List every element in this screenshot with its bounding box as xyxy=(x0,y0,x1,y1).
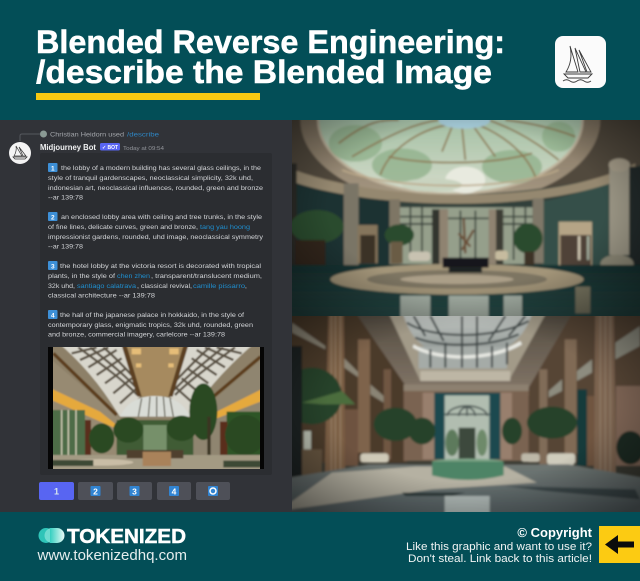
columns xyxy=(344,183,359,265)
bot badge: ✓ BOT xyxy=(102,145,118,151)
image: lobby with stained glass dome xyxy=(292,120,640,316)
button 3 xyxy=(117,482,152,500)
floor xyxy=(53,454,260,469)
palms xyxy=(89,383,265,455)
button 3: 3 xyxy=(132,486,137,496)
prompt 3: , xyxy=(245,283,247,290)
button 1: 1 xyxy=(54,486,59,496)
icon: bot avatar xyxy=(9,142,31,164)
button 4 xyxy=(157,482,191,500)
prompt 3: 32k uhd, xyxy=(48,283,75,290)
ceiling xyxy=(292,120,640,188)
title: /describe the Blended Image xyxy=(36,54,492,90)
prompt 1: the lobby of a modern building has several glass ceilings, in the xyxy=(61,165,261,172)
prompt 2: of fine lines, delicate curves, green and bronze, xyxy=(48,224,198,231)
image: lobby with skylight and fountain xyxy=(292,316,640,512)
right columns xyxy=(594,303,616,473)
back wall xyxy=(404,384,529,391)
back dome xyxy=(120,396,190,417)
brand name: TOKENIZED xyxy=(67,525,186,548)
band above windows xyxy=(279,163,635,204)
reflections xyxy=(398,294,524,316)
central table xyxy=(127,450,183,458)
floor xyxy=(292,264,640,316)
benches xyxy=(360,453,389,463)
central beam xyxy=(126,347,184,397)
header xyxy=(36,24,606,100)
prompt 3: , transparent/translucent medium, xyxy=(151,273,262,280)
glass foliage xyxy=(329,122,575,183)
left columns xyxy=(325,303,345,473)
right door xyxy=(559,222,592,265)
back curtains and door xyxy=(434,393,500,459)
floor xyxy=(279,464,640,525)
prompt 3: classical architecture --ar 139:78 xyxy=(48,292,155,300)
side walls xyxy=(292,316,406,463)
title underline xyxy=(36,93,260,100)
plants xyxy=(282,368,640,464)
prompt 4: the hall of the japanese palace in hokkaido, in the style of xyxy=(60,312,244,319)
title: Blended Reverse Engineering: xyxy=(36,24,505,60)
skylight frame xyxy=(388,316,546,380)
button 1 xyxy=(39,482,74,500)
copyright text: Don't steal. Link back to this article! xyxy=(408,553,592,565)
prompt 1: 1 xyxy=(51,166,55,172)
prompt 2: impressionist gardens, rounded, uhd image, neoclassical symmetry xyxy=(48,234,264,241)
plants xyxy=(290,210,543,253)
prompt 3: 3 xyxy=(51,264,55,270)
image: blended lobby with glass roof xyxy=(48,347,264,469)
timestamp: Today at 09:54 xyxy=(123,146,164,152)
prompt 4 xyxy=(48,310,253,338)
copyright text: © Copyright xyxy=(517,525,593,540)
central table xyxy=(443,258,489,268)
prompt 3: camille pissarro xyxy=(193,283,245,290)
back wall xyxy=(400,166,640,266)
copyright text xyxy=(406,525,593,565)
button refresh xyxy=(196,482,230,500)
prompt 2 xyxy=(48,212,264,250)
back window with garden xyxy=(117,420,193,455)
prompt 1: indonesian art, neoclassical influences, rounded, green and bronze xyxy=(48,185,263,192)
reply line with user: /describe xyxy=(127,132,160,138)
reply line with user: Christian Heidorn used xyxy=(50,132,124,138)
button 4: 4 xyxy=(172,486,177,496)
central windows xyxy=(399,207,533,264)
icon: Midjourney sailboat xyxy=(555,36,606,88)
prompt 2: --ar 139:78 xyxy=(48,244,83,250)
left door xyxy=(358,225,378,263)
sofas xyxy=(409,252,430,261)
prompt 3: , classical revival, xyxy=(137,283,192,290)
prompt 4: 4 xyxy=(51,312,55,320)
embed card xyxy=(48,163,264,469)
yellow arrow box xyxy=(599,526,640,563)
left vault xyxy=(62,347,140,417)
copyright text: Like this graphic and want to use it? xyxy=(406,541,592,553)
left glass wall xyxy=(53,409,86,456)
button 2 xyxy=(78,482,113,500)
dome ribs xyxy=(339,120,575,186)
prompt 2: tang yau hoong xyxy=(200,224,250,231)
button 2: 2 xyxy=(93,486,98,496)
prompt 1: style of tranquil gardenscapes, neoclassical simplicity, 32k uhd, xyxy=(48,175,253,182)
prompt 3: santiago calatrava xyxy=(77,283,136,290)
skylight glass xyxy=(402,316,532,347)
bot name: Midjourney Bot xyxy=(40,143,96,152)
prompt 1: --ar 139:78 xyxy=(48,194,83,202)
website url: www.tokenizedhq.com xyxy=(36,548,187,564)
prompt 2: an enclosed lobby area with ceiling and tree trunks, in the style xyxy=(61,214,262,221)
prompt 2: 2 xyxy=(51,214,55,222)
right glass wall xyxy=(226,410,260,456)
buttons xyxy=(39,482,230,500)
title xyxy=(36,24,505,90)
footer xyxy=(36,525,640,565)
left and right walls xyxy=(53,362,119,454)
brand logo mark xyxy=(38,528,64,543)
fountain xyxy=(432,459,504,465)
prompt 4: and bronze, commercial imagery, carlelcore --ar 139:78 xyxy=(48,332,225,338)
panel: Discord chat xyxy=(0,120,292,512)
bot badge xyxy=(100,143,120,151)
prompt 3: chen zhen xyxy=(117,273,150,280)
reply line with user xyxy=(20,130,160,141)
prompt 3 xyxy=(48,261,262,300)
prompt 4: contemporary glass, enigmatic tropics, 32k uhd, rounded, green xyxy=(48,322,253,329)
right vault xyxy=(170,347,252,416)
prompt 3: plants, in the style of xyxy=(48,273,115,280)
prompt 1 xyxy=(48,163,263,202)
prompt 3: the hotel lobby at the victoria resort is decorated with tropical xyxy=(60,263,262,270)
